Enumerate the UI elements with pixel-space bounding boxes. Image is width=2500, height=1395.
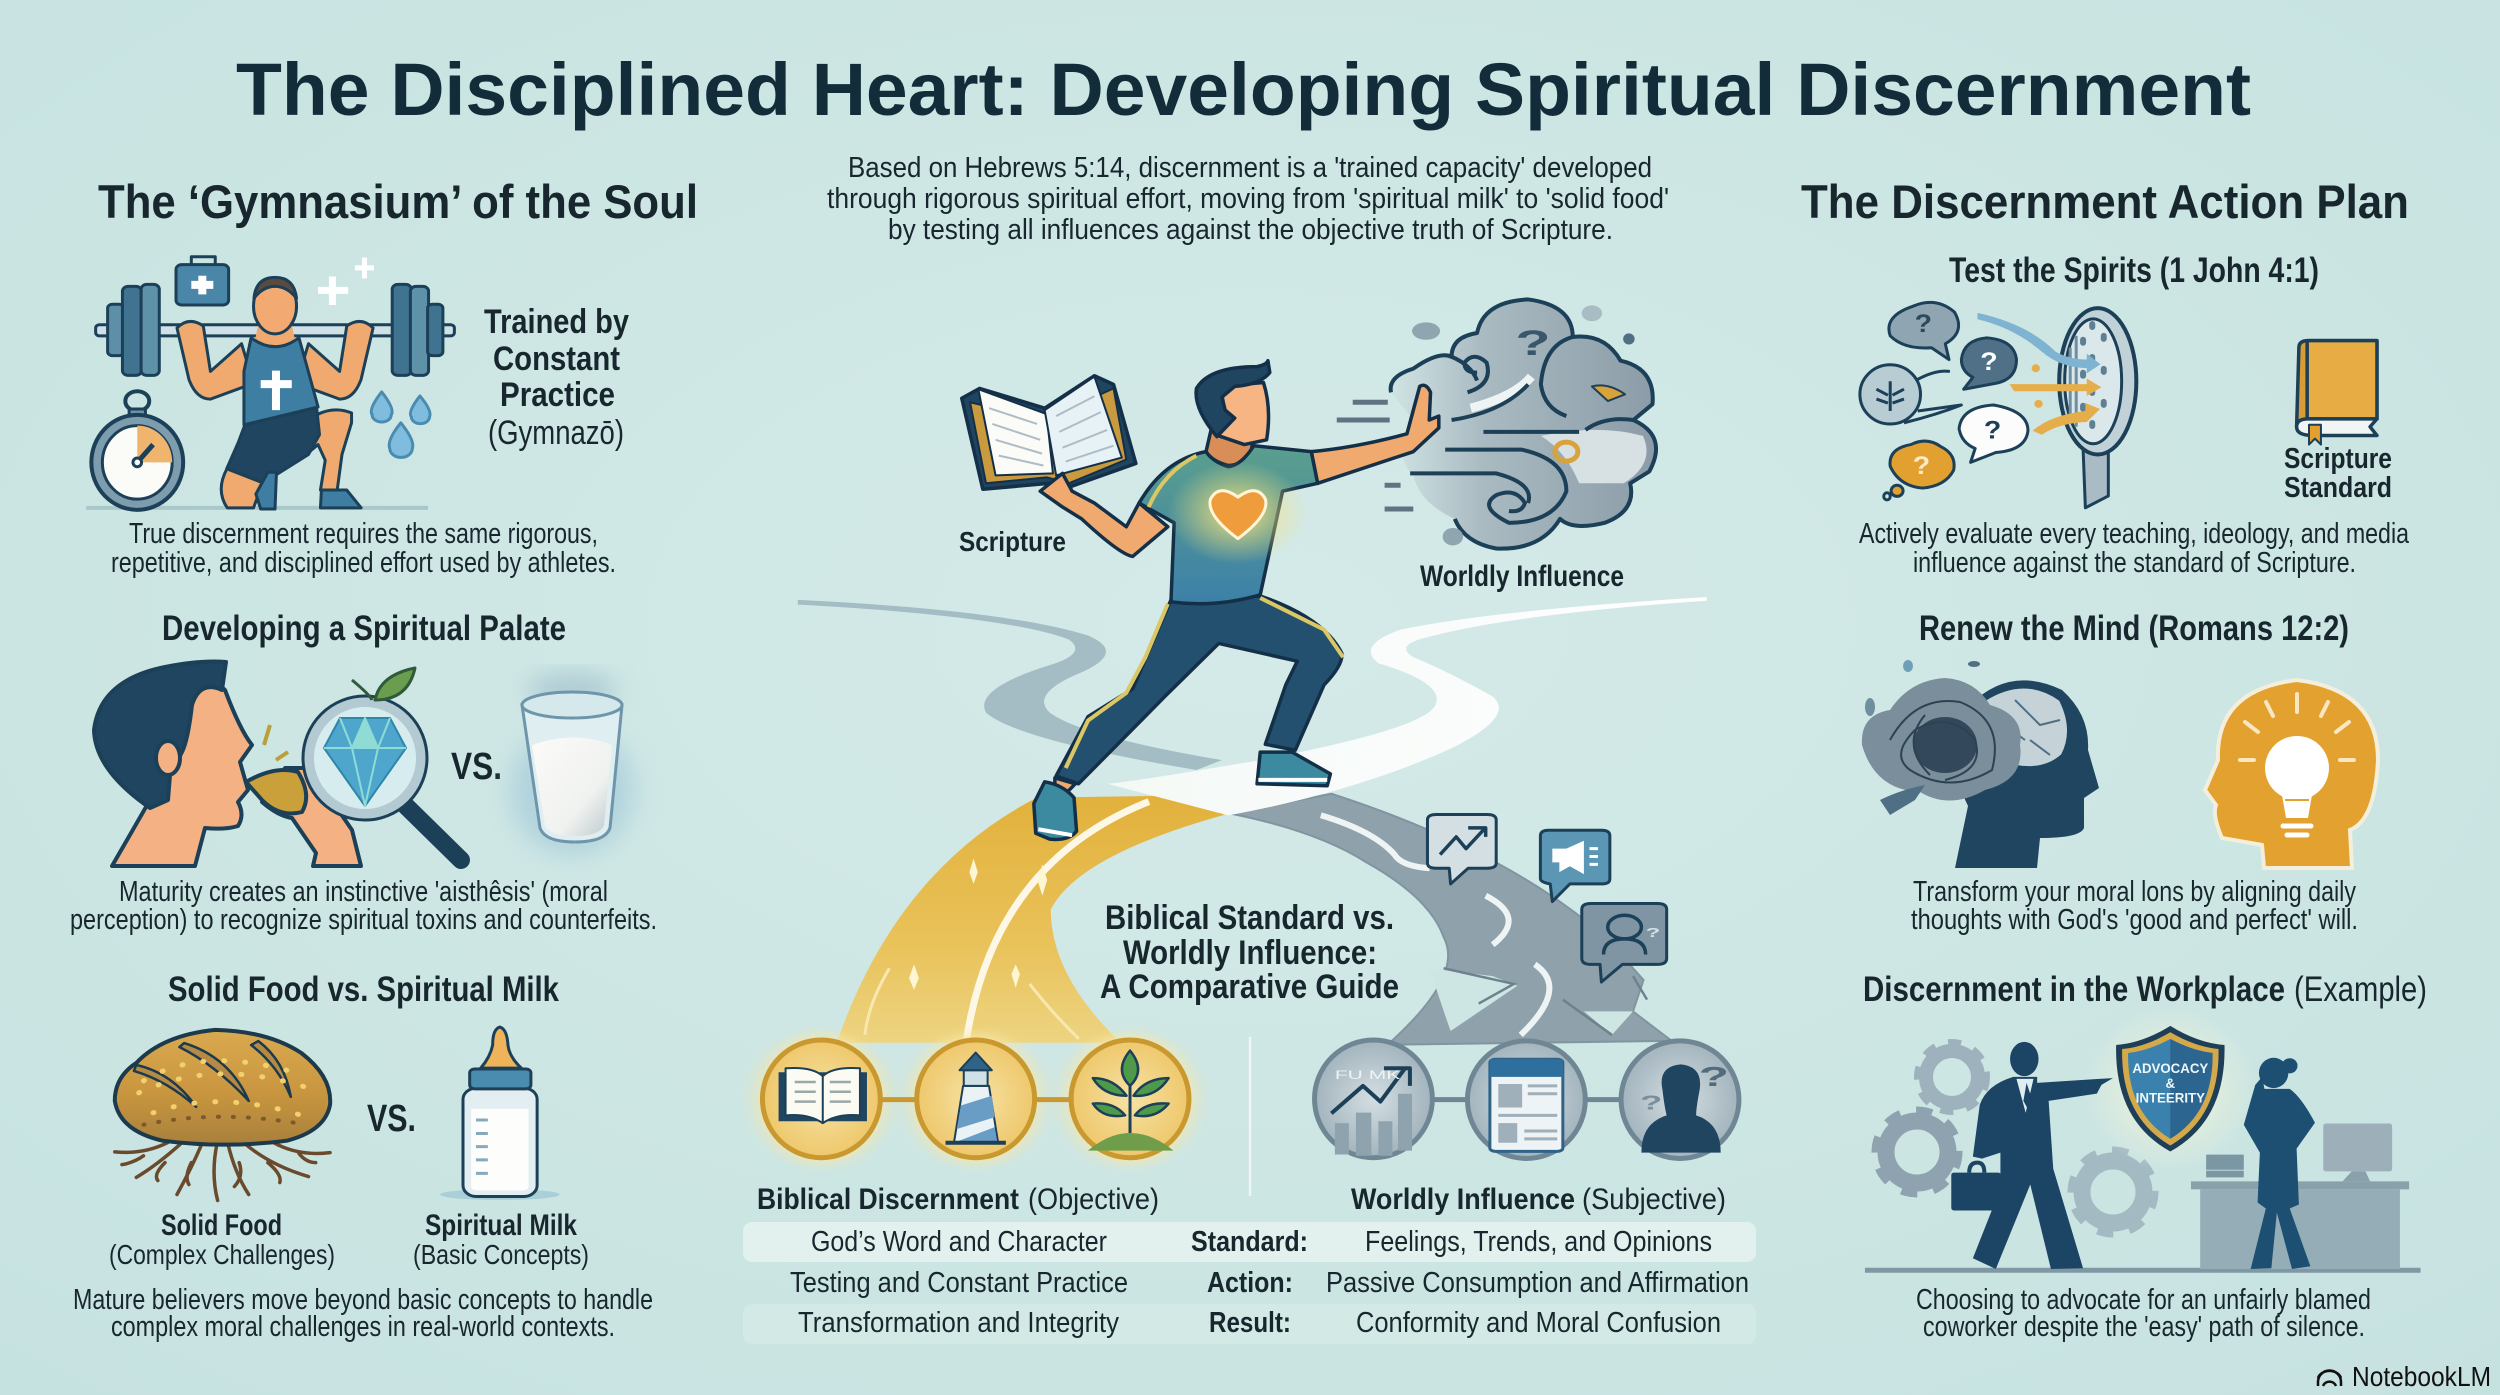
text: palate description: Maturity creates an instinctive 'aisthêsis' (moral (119, 876, 608, 908)
heading: palate: Developing a Spiritual Palate (162, 609, 566, 648)
label: spiritual milk: Spiritual Milk (425, 1209, 577, 1242)
neck (1206, 424, 1254, 465)
column header: worldly influence: Worldly Influence (1351, 1183, 1575, 1216)
road: golden biblical path (837, 796, 1230, 1043)
figure: person holding scripture and pushing influence away (962, 361, 1439, 839)
label: spiritual milk (413, 1209, 589, 1270)
row: standard (811, 1226, 1712, 1258)
label: vs palate: VS. (451, 746, 502, 788)
medallion: silhouette: ? (1640, 1092, 1662, 1114)
panel: discernment in the workplace (1863, 970, 2427, 1343)
shirt (1139, 446, 1318, 604)
medallion: news page (1467, 1041, 1585, 1158)
title: The Disciplined Heart: Developing Spiritual Discernment (236, 48, 2251, 131)
icon: worldly influence storm cloud (1337, 299, 1656, 549)
heading: renew: Renew the Mind (Romans 12:2) (1919, 609, 2349, 648)
road: gray winding path (798, 600, 1222, 770)
icons: worldly medallions (1315, 1040, 1739, 1158)
row: result: Conformity and Moral Confusion (1356, 1307, 1721, 1339)
row: standard: God’s Word and Character (811, 1226, 1107, 1258)
text: test the spirits description: influence against the standard of Scripture. (1913, 547, 2356, 579)
text: gymnasium description: True discernment requires the same rigorous, (129, 518, 598, 550)
text: food description: complex moral challenges in real-world contexts. (111, 1311, 615, 1343)
row: action: Testing and Constant Practice (790, 1267, 1128, 1299)
icon: bubbles filtered by sieve: ? (1913, 452, 1930, 480)
row: standard: Standard: (1191, 1226, 1308, 1258)
text: food description (73, 1284, 653, 1343)
label: solid food: Solid Food (161, 1209, 282, 1242)
heading: comparative guide: Worldly Influence: (1123, 934, 1377, 972)
text: food description: Mature believers move beyond basic concepts to handle (73, 1284, 653, 1316)
icon: man tasting food with magnifier (94, 662, 461, 866)
icon: bubbles filtered by sieve: ? (1984, 416, 2001, 444)
heading: test the spirits: Test the Spirits (1 John 4:1) (1949, 251, 2319, 290)
label: solid food (109, 1209, 335, 1270)
shield (2116, 1026, 2225, 1151)
shield: ADVOCACY (2132, 1061, 2208, 1076)
row: result: Result: (1209, 1307, 1291, 1339)
text: workplace description (1916, 1284, 2371, 1343)
label: scripture standard (2284, 443, 2392, 504)
icon: bubbles filtered by sieve: ? (1915, 310, 1932, 337)
heading: comparative guide: Biblical Standard vs. (1105, 899, 1394, 937)
icon: clouded head (1862, 660, 2099, 868)
row: action: Action: (1207, 1267, 1293, 1299)
label: spiritual milk: (Basic Concepts) (413, 1239, 589, 1270)
label: trained by constant practice: Practice (500, 376, 615, 414)
shoe and legs (1034, 596, 1343, 839)
intro paragraph: through rigorous spiritual effort, moving from 'spiritual milk' to 'solid food' (827, 183, 1669, 215)
heart (1168, 462, 1308, 564)
label: scripture standard: Scripture (2284, 443, 2392, 475)
medallion: trend chart (1315, 1040, 1432, 1158)
text: gymnasium description: repetitive, and disciplined effort used by athletes. (111, 547, 616, 579)
panel: spiritual palate (70, 609, 657, 936)
row: action (790, 1267, 1749, 1299)
road: gray cracked worldly path (1230, 794, 1672, 1045)
table: comparison (743, 1183, 1756, 1344)
head (1219, 382, 1269, 445)
icons: biblical medallions (755, 1033, 1197, 1165)
book (962, 376, 1136, 489)
text: renew description (1911, 876, 2358, 936)
medallion: lighthouse (917, 1040, 1035, 1158)
row: standard: Feelings, Trends, and Opinions (1365, 1226, 1712, 1258)
icons: worldly speech bubbles: ? (1646, 926, 1660, 940)
road: white path ahead (1107, 597, 1707, 815)
label: worldly influence: Worldly Influence (1420, 560, 1624, 593)
divider (1249, 1037, 1251, 1196)
label: trained by constant practice: Trained by (484, 303, 629, 341)
row band: result (743, 1304, 1756, 1344)
medallion: open book (762, 1040, 880, 1158)
icon: scripture standard book (2297, 341, 2377, 445)
medallion: trend chart: FU MK (1335, 1069, 1401, 1082)
heading: comparative guide: A Comparative Guide (1100, 968, 1399, 1006)
text: workplace description: coworker despite the 'easy' path of silence. (1923, 1311, 2365, 1343)
heading: workplace: (Example) (2294, 970, 2427, 1009)
desk and monitor (2191, 1124, 2409, 1269)
label: trained by constant practice: Constant (493, 340, 620, 378)
heading: comparative guide (1100, 899, 1399, 1006)
row: action: Passive Consumption and Affirmation (1326, 1267, 1749, 1299)
icons: gears (1876, 1043, 2154, 1233)
heading: action plan: The Discernment Action Plan (1801, 175, 2409, 228)
holding arm (1040, 473, 1168, 556)
medallion: plant (1071, 1040, 1189, 1158)
panel: central path illustration (743, 299, 1756, 1344)
label: trained by constant practice (484, 303, 629, 452)
row band: standard (743, 1222, 1756, 1262)
heading: gymnasium: The ‘Gymnasium’ of the Soul (98, 175, 698, 228)
man pointing (1951, 1042, 2113, 1269)
heading: solid food: Solid Food vs. Spiritual Milk (168, 970, 559, 1009)
column header: worldly influence: (Subjective) (1582, 1183, 1726, 1216)
extended arm (1311, 385, 1439, 483)
label: trained by constant practice: (Gymnazō) (488, 414, 624, 452)
panel: test the spirits (1801, 175, 2410, 579)
icon: bubbles filtered by sieve: ? (1980, 348, 1998, 375)
row: result (798, 1307, 1721, 1339)
text: renew description: thoughts with God's 'good and perfect' will. (1911, 904, 2358, 936)
icon: lightbulb head (2205, 680, 2378, 868)
icon: bread with roots (115, 1030, 330, 1200)
intro paragraph: by testing all influences against the objective truth of Scripture. (888, 214, 1613, 246)
column header: biblical discernment: Biblical Discernment (757, 1183, 1019, 1216)
heading: workplace: Discernment in the Workplace (1863, 970, 2285, 1009)
panel: gymnasium of the soul (86, 175, 698, 579)
text: gymnasium description (111, 518, 616, 579)
shield: & (2166, 1076, 2175, 1091)
intro paragraph (827, 152, 1669, 246)
panel: solid food vs spiritual milk (73, 970, 653, 1343)
icon: baby bottle (440, 1027, 560, 1200)
text: workplace description: Choosing to advocate for an unfairly blamed (1916, 1284, 2371, 1316)
medallion: silhouette: ? (1699, 1062, 1729, 1092)
label: scripture: Scripture (959, 526, 1066, 557)
row: result: Transformation and Integrity (798, 1307, 1119, 1339)
icon: bubbles filtered by sieve (1860, 302, 2136, 508)
woman (2244, 1058, 2315, 1269)
label: solid food: (Complex Challenges) (109, 1239, 335, 1270)
text: test the spirits description (1859, 518, 2410, 579)
medallion: silhouette (1621, 1041, 1739, 1158)
icon: glass of milk (510, 674, 634, 855)
icon: worldly influence storm cloud: ? (1515, 323, 1550, 363)
label: vs food: VS. (367, 1098, 416, 1140)
column header: worldly influence (1351, 1183, 1726, 1216)
icons: worldly speech bubbles (1427, 815, 1667, 982)
intro paragraph: Based on Hebrews 5:14, discernment is a 'trained capacity' developed (848, 152, 1652, 184)
text: renew description: Transform your moral lons by aligning daily (1913, 876, 2356, 908)
label: scripture standard: Standard (2284, 472, 2392, 504)
text: palate description: perception) to recognize spiritual toxins and counterfeits. (70, 904, 657, 936)
text: palate description (70, 876, 657, 936)
panel: renew the mind (1862, 609, 2378, 936)
column header: biblical discernment: (Objective) (1028, 1183, 1159, 1216)
shield: INTEERITY (2136, 1090, 2205, 1106)
scene: workplace silhouettes (1865, 1005, 2421, 1270)
icon: weightlifter with stopwatch (86, 257, 454, 510)
